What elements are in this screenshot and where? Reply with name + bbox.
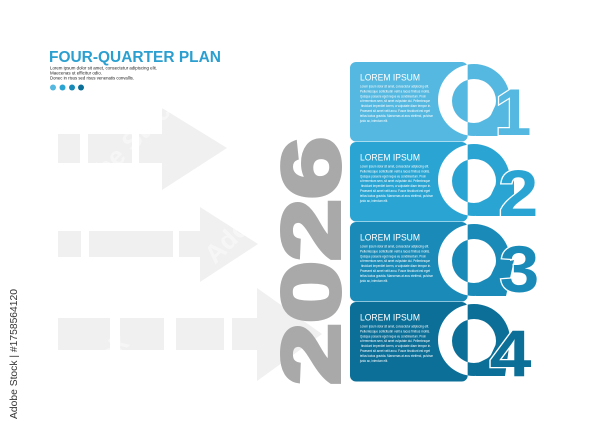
panel: Q4: [350, 302, 531, 390]
Q3 letter Q: [438, 224, 514, 296]
Q3 body text: tellus luctus gravida. Maecenas at arcu eleifend, pulvinar: [360, 274, 434, 278]
Q2 body text: tellus luctus gravida. Maecenas at arcu eleifend, pulvinar: [360, 194, 434, 198]
Q2 body text: [359, 164, 434, 203]
Q1 heading: LOREM IPSUM: [360, 72, 420, 84]
Q3 body text: Lorem ipsum dolor sit amet, consectetur adipiscing elit.: [360, 244, 429, 248]
Q1 body text: Praesent sit amet velit arcu. Fusce tincidunt est eget: [360, 109, 430, 113]
Q1 body text: justo ac, interdum elit.: [359, 119, 388, 123]
panel: Q3: [350, 222, 539, 306]
Q1 body text: tellus luctus gravida. Maecenas at arcu eleifend, pulvinar: [360, 114, 434, 118]
watermarks: Adobe Stock: [53, 85, 187, 219]
year 2026: 2026: [264, 137, 357, 385]
Q1 body text: Quisque posuere eget neque eu condimentum. Proin: [360, 94, 426, 98]
Q2 body text: a fermentum sem, sit amet vulputate dui. Pellentesque: [360, 179, 430, 183]
Q3 body text: tincidunt imperdiet lorem, a vulputate diam tempor in.: [361, 264, 431, 268]
Q1 body text: Pellentesque sollicitudin velit a lacus finibus mollis.: [360, 89, 430, 93]
Q3 body text: [359, 244, 434, 283]
Q2 number: 2: [499, 156, 538, 230]
Q3 number: 3: [500, 232, 539, 306]
Q2 body text: justo ac, interdum elit.: [359, 199, 388, 203]
Q2 body text: Pellentesque sollicitudin velit a lacus finibus mollis.: [360, 169, 430, 173]
Q4 letter Q: [438, 304, 510, 376]
Q1 letter Q: [438, 64, 514, 136]
Q4 body text: tincidunt imperdiet lorem, a vulputate diam tempor in.: [361, 344, 431, 348]
Q3 body text: Pellentesque sollicitudin velit a lacus finibus mollis.: [360, 249, 430, 253]
Q3 body text: Quisque posuere eget neque eu condimentum. Proin: [360, 254, 426, 258]
Q3 heading: LOREM IPSUM: [360, 232, 420, 244]
Q4 body text: Pellentesque sollicitudin velit a lacus finibus mollis.: [360, 329, 430, 333]
arrow: middle: [58, 207, 258, 282]
intro text: Lorem ipsum dolor sit amet, consectetur adipiscing elit.: [50, 66, 157, 70]
Q2 body text: Praesent sit amet velit arcu. Fusce tincidunt est eget: [360, 189, 430, 193]
stock image id: Adobe Stock | #1758564120: [8, 289, 20, 419]
Q4 body text: Quisque posuere eget neque eu condimentum. Proin: [360, 334, 426, 338]
Q2 heading: LOREM IPSUM: [360, 152, 420, 164]
Q2 letter Q: [438, 144, 514, 216]
intro text: [50, 66, 157, 80]
Q2 body text: Quisque posuere eget neque eu condimentum. Proin: [360, 174, 426, 178]
watermarks: Adobe: [198, 191, 276, 269]
Q4 number: 4: [490, 316, 531, 390]
Q1 body text: tincidunt imperdiet lorem, a vulputate diam tempor in.: [361, 104, 431, 108]
watermarks: Stock: [63, 328, 135, 399]
panel: Q2: [350, 142, 536, 222]
panel: Q1: [350, 62, 531, 149]
Q4 body text: justo ac, interdum elit.: [359, 359, 388, 363]
Q4 body text: Praesent sit amet velit arcu. Fusce tincidunt est eget: [360, 349, 430, 353]
Q1 body text: a fermentum sem, sit amet vulputate dui. Pellentesque: [360, 99, 430, 103]
Q3 body text: a fermentum sem, sit amet vulputate dui. Pellentesque: [360, 259, 430, 263]
Q4 body text: Lorem ipsum dolor sit amet, consectetur adipiscing elit.: [360, 324, 429, 328]
title: FOUR-QUARTER PLAN: [49, 49, 221, 66]
Q4 body text: a fermentum sem, sit amet vulputate dui. Pellentesque: [360, 339, 430, 343]
Q4 heading: LOREM IPSUM: [360, 312, 420, 324]
arrow: top: [58, 108, 227, 190]
Q4 body text: tellus luctus gravida. Maecenas at arcu eleifend, pulvinar: [360, 354, 434, 358]
Q1 body text: Lorem ipsum dolor sit amet, consectetur adipiscing elit.: [360, 84, 429, 88]
progress dots: [50, 84, 84, 90]
Q1 number: 1: [495, 75, 531, 149]
Q1 body text: [359, 84, 434, 123]
Q2 body text: Lorem ipsum dolor sit amet, consectetur adipiscing elit.: [360, 164, 429, 168]
watermarks: [53, 85, 276, 399]
Q4 body text: [359, 324, 434, 363]
arrow: bottom: [58, 288, 322, 381]
Q3 body text: justo ac, interdum elit.: [359, 279, 388, 283]
Q2 body text: tincidunt imperdiet lorem, a vulputate diam tempor in.: [361, 184, 431, 188]
intro text: Maecenas ut efficitur odio.: [50, 70, 102, 76]
Q3 body text: Praesent sit amet velit arcu. Fusce tincidunt est eget: [360, 269, 430, 273]
intro text: Donec in risus sed risus venenatis convallis.: [50, 76, 134, 80]
